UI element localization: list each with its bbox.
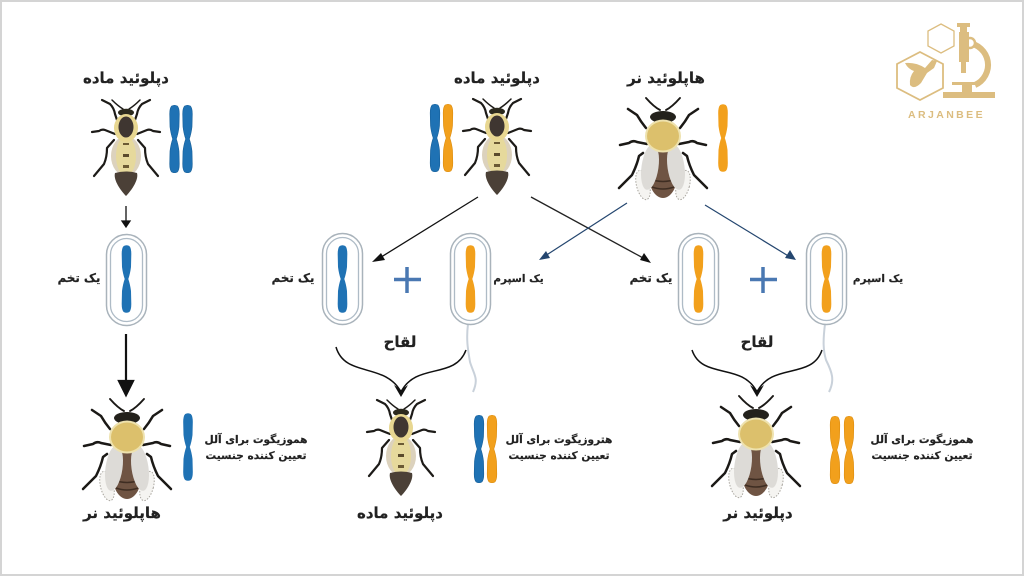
plus sign — [394, 267, 421, 293]
text: homozygous: هموزیگوت برای آلل — [871, 432, 973, 446]
fertilization arrow — [336, 347, 466, 397]
text: homozygous: تعیین کننده جنسیت — [206, 450, 307, 462]
arrows from parents — [372, 197, 796, 263]
logo text: ARJANBEE — [908, 109, 985, 121]
label: one egg: یک تخم — [272, 271, 314, 285]
heading: diploid male offspring: دپلوئید نر — [722, 504, 793, 523]
text: heterozygous: تعیین کننده جنسیت — [509, 450, 610, 462]
label: fertilization: لقاح — [741, 333, 773, 351]
heading: haploid male: هاپلوئید نر — [82, 504, 161, 523]
text: homozygous — [205, 432, 307, 462]
sperm with orange chromosome — [806, 234, 846, 324]
chromosome pair: blue — [170, 105, 192, 173]
text: homozygous: هموزیگوت برای آلل — [205, 432, 307, 446]
sperm with orange chromosome — [450, 234, 490, 324]
microscope — [943, 23, 995, 98]
label: one egg: یک تخم — [630, 271, 672, 285]
sperm tail — [467, 324, 476, 392]
hexagons — [897, 24, 954, 100]
text: homozygous: تعیین کننده جنسیت — [872, 450, 973, 462]
chromosome pair: blue and orange — [430, 104, 453, 172]
icon: diploid female bee — [92, 100, 160, 196]
arrow: male to right sperm — [705, 205, 796, 260]
arrow: female to left egg — [372, 197, 478, 262]
icon: diploid female offspring — [367, 400, 435, 496]
sperm tail — [824, 324, 832, 392]
panel: parents — [430, 69, 728, 201]
logo: Arjanbee — [897, 23, 995, 121]
heading: diploid female: دپلوئید ماده — [83, 69, 169, 88]
panel: heterozygous cross — [272, 234, 612, 523]
heading: haploid male parent: هاپلوئید نر — [626, 69, 705, 88]
panel: left lineage — [58, 69, 307, 523]
icon: haploid male bee — [83, 399, 171, 502]
egg with blue chromosome — [106, 234, 146, 326]
panel: homozygous cross — [630, 234, 973, 523]
label: one sperm: یک اسپرم — [493, 273, 544, 285]
arrow: female to right egg — [531, 197, 651, 263]
chromosome pair: orange — [830, 416, 854, 484]
fertilization arrow — [692, 350, 822, 397]
bee mark — [905, 60, 937, 87]
icon: male parent bee — [619, 98, 707, 201]
egg with orange chromosome — [678, 234, 718, 324]
arrow: male to left sperm — [539, 203, 627, 260]
chromosome pair: blue and orange — [474, 415, 497, 483]
heading: diploid female parent: دپلوئید ماده — [454, 69, 540, 88]
icon: diploid male offspring — [712, 396, 800, 499]
arrow: egg to male — [119, 334, 133, 395]
heading: diploid female offspring: دپلوئید ماده — [357, 504, 443, 523]
text: heterozygous — [506, 432, 612, 462]
chromosome: orange single — [718, 104, 728, 172]
label: fertilization: لقاح — [384, 333, 416, 351]
arrow: to egg — [122, 206, 130, 227]
egg with blue chromosome — [322, 234, 362, 324]
chromosome: blue single — [183, 413, 193, 481]
text: homozygous — [871, 432, 973, 462]
icon: female parent bee — [463, 99, 531, 195]
text: heterozygous: هتروزیگوت برای آلل — [506, 432, 612, 446]
plus sign — [750, 267, 777, 293]
label: one sperm: یک اسپرم — [853, 273, 903, 285]
label: one egg: یک تخم — [58, 271, 100, 285]
